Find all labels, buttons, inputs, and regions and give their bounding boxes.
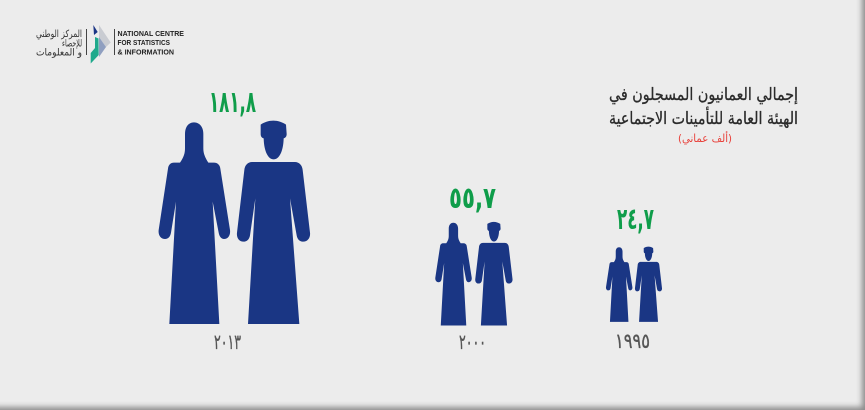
- woman figure: [159, 122, 230, 324]
- title line 1: إجمالي العمانيون المسجلون في: [609, 85, 798, 105]
- logo: Arabic name: المركز الوطني: [36, 29, 82, 40]
- value 1995: ٢٤,٧: [617, 202, 654, 237]
- logo: English name: [118, 29, 184, 56]
- logo: English name: NATIONAL CENTRE: [118, 29, 184, 38]
- woman figure: [435, 223, 472, 326]
- year 1995: ١٩٩٥: [615, 329, 650, 353]
- column 2013: [159, 85, 310, 354]
- woman figure: [606, 247, 632, 322]
- man figure: [475, 222, 513, 326]
- logo: National Centre for Statistics & Information: [36, 25, 184, 64]
- logo: Arabic name: و المعلومات: [36, 48, 82, 58]
- value 2000: ٥٥,٧: [449, 181, 496, 216]
- value 2013: ١٨١,٨: [209, 85, 256, 120]
- logo: emblem: [91, 25, 111, 64]
- title: [609, 85, 798, 145]
- column 1995: [606, 202, 662, 353]
- figures 2000: [435, 222, 513, 326]
- year 2000: ٢٠٠٠: [459, 330, 486, 354]
- logo: English name: & INFORMATION: [118, 48, 174, 56]
- year 2013: ٢٠١٣: [214, 330, 241, 354]
- logo: Arabic name: للإحصاء: [62, 38, 82, 50]
- man figure: [237, 121, 310, 324]
- column 2000: [435, 181, 513, 354]
- logo: English name: FOR STATISTICS: [118, 38, 170, 47]
- figures 1995: [606, 247, 662, 322]
- man figure: [635, 247, 662, 322]
- unit note: (ألف عماني): [678, 131, 732, 145]
- figures 2013: [159, 121, 310, 324]
- logo: Arabic name: [36, 29, 82, 58]
- title line 2: الهيئة العامة للتأمينات الاجتماعية: [609, 106, 798, 129]
